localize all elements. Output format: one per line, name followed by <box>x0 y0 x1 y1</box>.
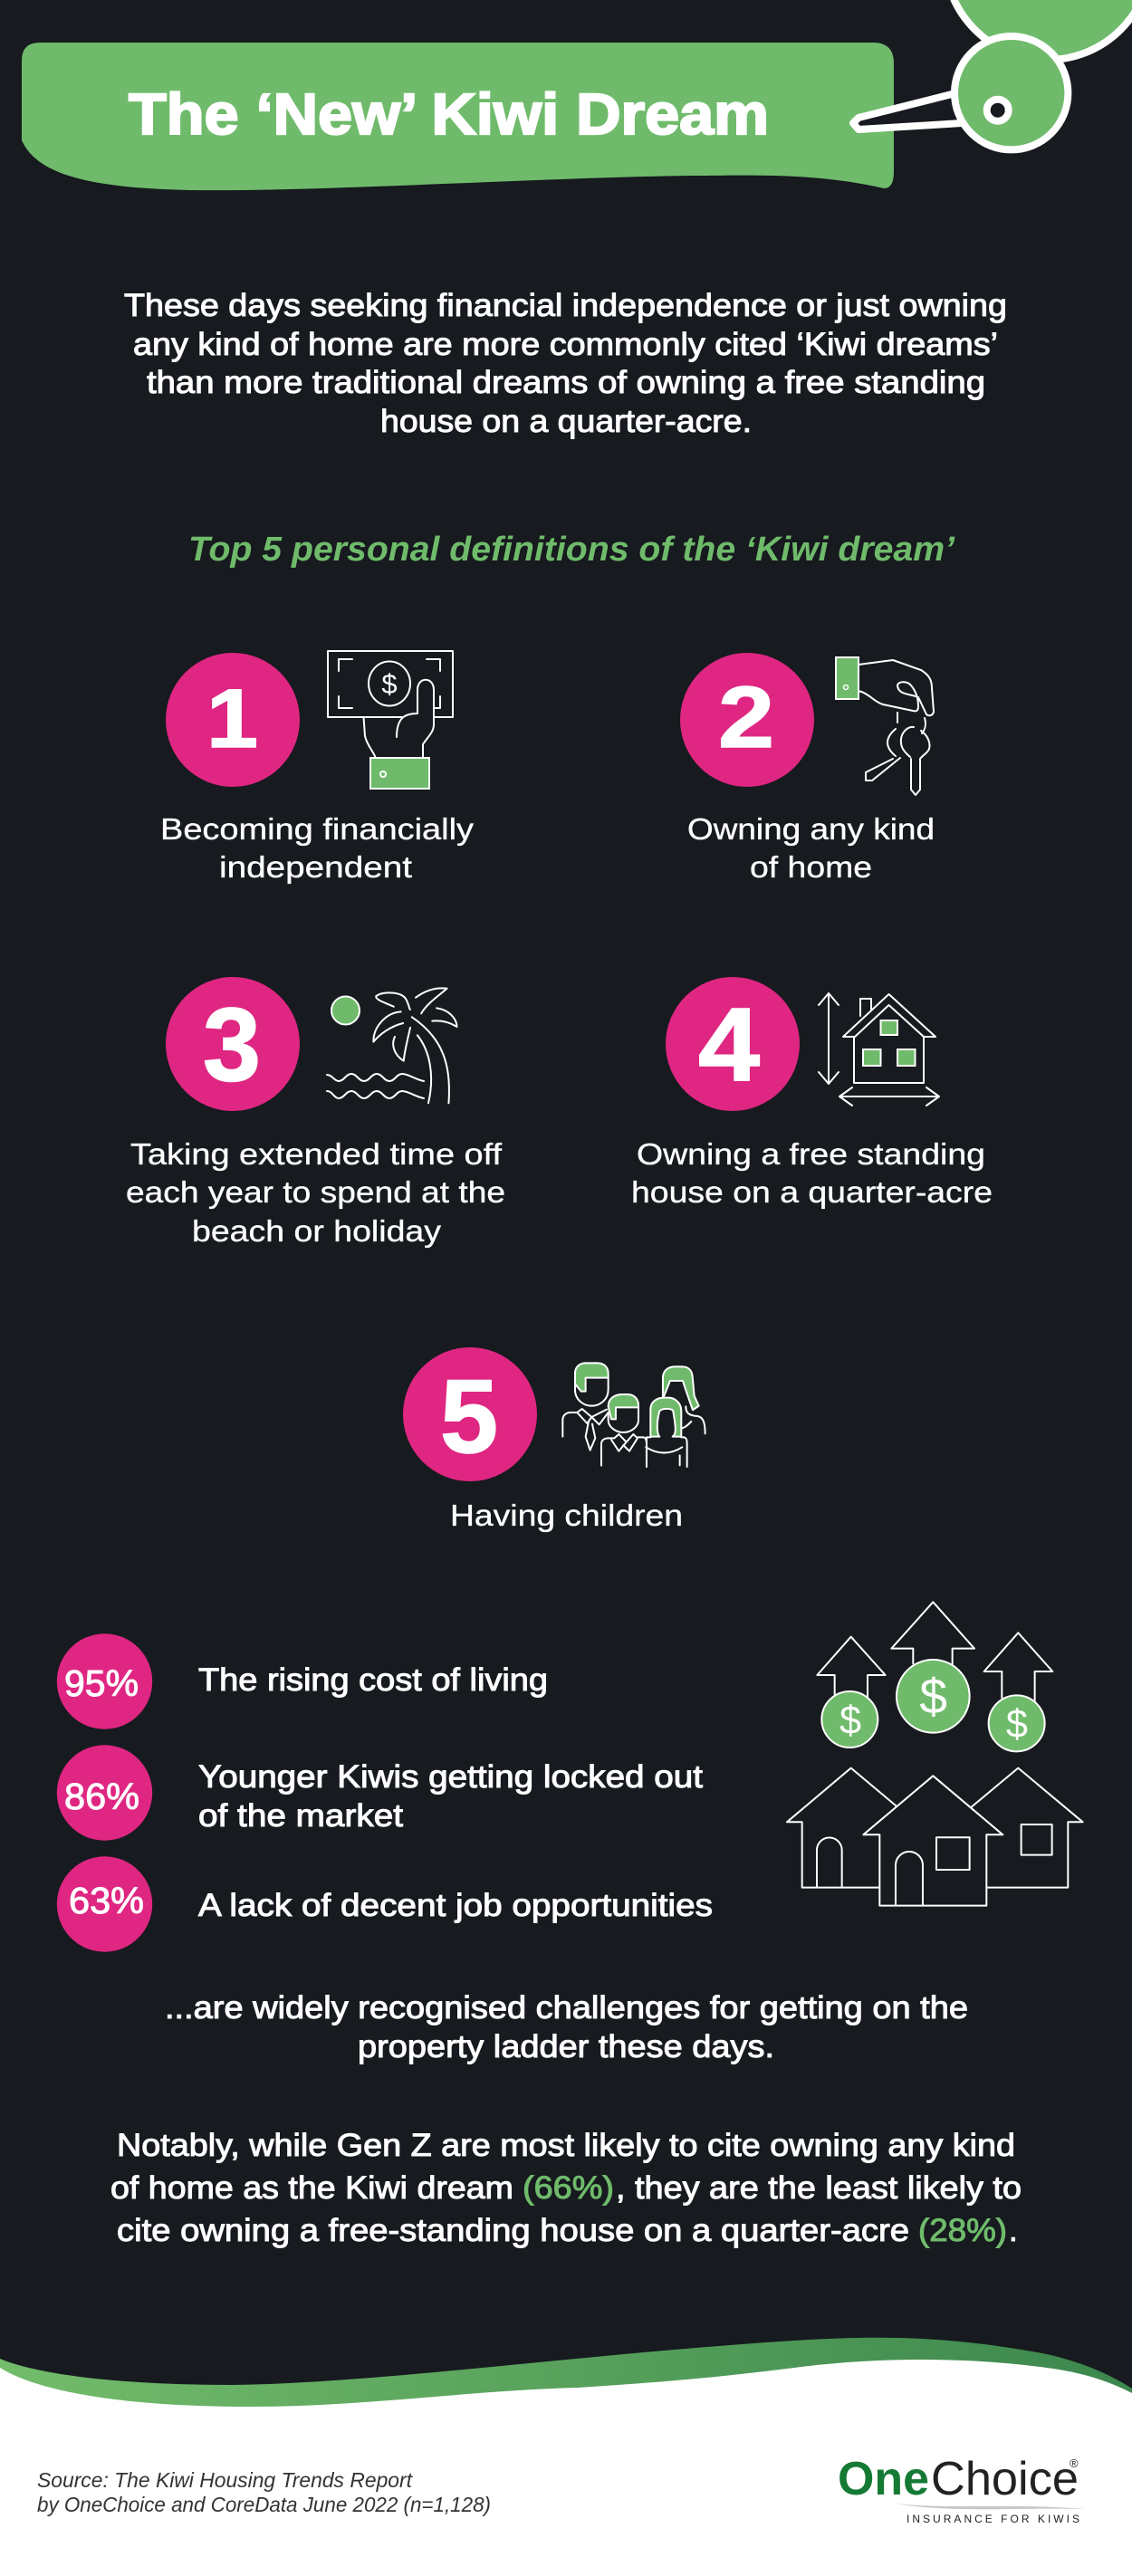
intro text: These days seeking financial independence or just owning <box>124 288 1007 323</box>
label 5: Having children <box>450 1499 683 1532</box>
section heading: Top 5 personal definitions of the ‘Kiwi dream’ <box>188 531 955 569</box>
number badge 4: 4 <box>698 987 760 1103</box>
number badge 1: 1 <box>206 673 258 765</box>
icon: rising house prices <box>787 1602 1083 1906</box>
text: challenges summary: ...are widely recognised challenges for getting on the <box>165 1990 968 2025</box>
item 2: owning any kind of home <box>680 653 935 884</box>
label 1: independent <box>219 850 412 884</box>
text: Gen Z note <box>110 2128 1022 2248</box>
item 3: extended time off <box>126 977 505 1248</box>
text: job opportunities: A lack of decent job opportunities <box>198 1888 713 1923</box>
icon: kiwi bird <box>853 0 1132 149</box>
badge 63%: 63% <box>69 1880 144 1921</box>
badge 95% <box>57 1633 152 1729</box>
text: Gen Z note: (28%) <box>918 2213 1007 2248</box>
source note <box>37 2468 491 2516</box>
statistic: 63% lack of job opportunities <box>57 1856 713 1952</box>
number badge 4 <box>666 977 800 1111</box>
banner shape <box>22 43 894 190</box>
label 3: each year to spend at the <box>126 1175 505 1209</box>
icon: rising house prices: $ <box>839 1699 861 1742</box>
label 4: Owning a free standing <box>637 1137 985 1171</box>
intro text <box>124 288 1007 439</box>
icon: hand holding banknote: $ <box>381 668 398 700</box>
intro text: any kind of home are more commonly cited ‘Kiwi dreams’ <box>133 327 998 362</box>
logo: OneChoice <box>838 2453 1085 2525</box>
number badge 1 <box>166 653 300 787</box>
label 4: house on a quarter-acre <box>631 1175 993 1209</box>
logo: OneChoice: ® <box>1070 2456 1079 2470</box>
number badge 3 <box>166 977 300 1111</box>
logo: OneChoice: INSURANCE FOR KIWIS <box>907 2513 1079 2525</box>
source note: by OneChoice and CoreData June 2022 (n=1,128) <box>37 2493 491 2516</box>
label 2: of home <box>750 850 872 884</box>
title: The ‘New’ Kiwi Dream <box>129 81 769 147</box>
number badge 2: 2 <box>718 669 774 766</box>
icon: family <box>562 1363 705 1467</box>
label 1 <box>160 812 475 884</box>
item 1: becoming financially independent <box>160 651 475 884</box>
text: Gen Z note: of home as the Kiwi dream <box>110 2170 513 2206</box>
icon: hand holding banknote <box>328 651 453 789</box>
text: Gen Z note: (66%) <box>523 2170 614 2206</box>
text: Gen Z note: , they are the least likely to <box>616 2170 1022 2206</box>
text: challenges summary <box>165 1990 968 2064</box>
logo: OneChoice: One <box>838 2453 929 2505</box>
logo: OneChoice: Choice <box>931 2453 1079 2505</box>
intro text: than more traditional dreams of owning a free standing <box>147 365 985 400</box>
number badge 5 <box>403 1347 537 1481</box>
badge 86%: 86% <box>64 1776 139 1817</box>
label 2 <box>687 812 935 884</box>
text: younger kiwis <box>198 1759 703 1834</box>
statistic: 86% younger kiwis locked out <box>57 1745 703 1841</box>
icon: house with dimension arrows <box>819 993 939 1106</box>
footer wave <box>0 2338 1132 2576</box>
item 5: having children <box>403 1347 705 1532</box>
statistic: 95% rising cost of living <box>57 1633 548 1729</box>
source note: Source: The Kiwi Housing Trends Report <box>37 2468 414 2492</box>
label 2: Owning any kind <box>687 812 935 846</box>
text: Gen Z note: Notably, while Gen Z are most likely to cite owning any kind <box>117 2128 1015 2163</box>
icon: rising house prices: $ <box>1006 1702 1028 1746</box>
badge 86% <box>57 1745 152 1841</box>
label 4 <box>631 1137 993 1209</box>
number badge 5: 5 <box>440 1359 498 1475</box>
label 1: Becoming financially <box>160 812 475 846</box>
icon: beach with sun and palm <box>327 988 457 1103</box>
intro text: house on a quarter-acre. <box>380 404 752 439</box>
text: younger kiwis: of the market <box>198 1798 403 1834</box>
text: younger kiwis: Younger Kiwis getting locked out <box>198 1759 703 1795</box>
title banner <box>22 43 894 190</box>
number badge 3: 3 <box>203 987 261 1103</box>
badge 63% <box>57 1856 152 1952</box>
label 3: beach or holiday <box>192 1214 442 1248</box>
number badge 2 <box>680 653 814 787</box>
text: Gen Z note: cite owning a free-standing house on a quarter-acre <box>117 2213 909 2248</box>
label 3: Taking extended time off <box>130 1137 503 1171</box>
icon: hand holding keys <box>836 657 934 795</box>
text: rising cost: The rising cost of living <box>198 1662 548 1698</box>
text: Gen Z note: . <box>1009 2213 1018 2248</box>
badge 95%: 95% <box>64 1662 139 1704</box>
text: challenges summary: property ladder these days. <box>358 2029 774 2064</box>
icon: rising house prices: $ <box>919 1669 947 1725</box>
item 4: free standing house <box>631 977 993 1209</box>
label 3 <box>126 1137 505 1248</box>
